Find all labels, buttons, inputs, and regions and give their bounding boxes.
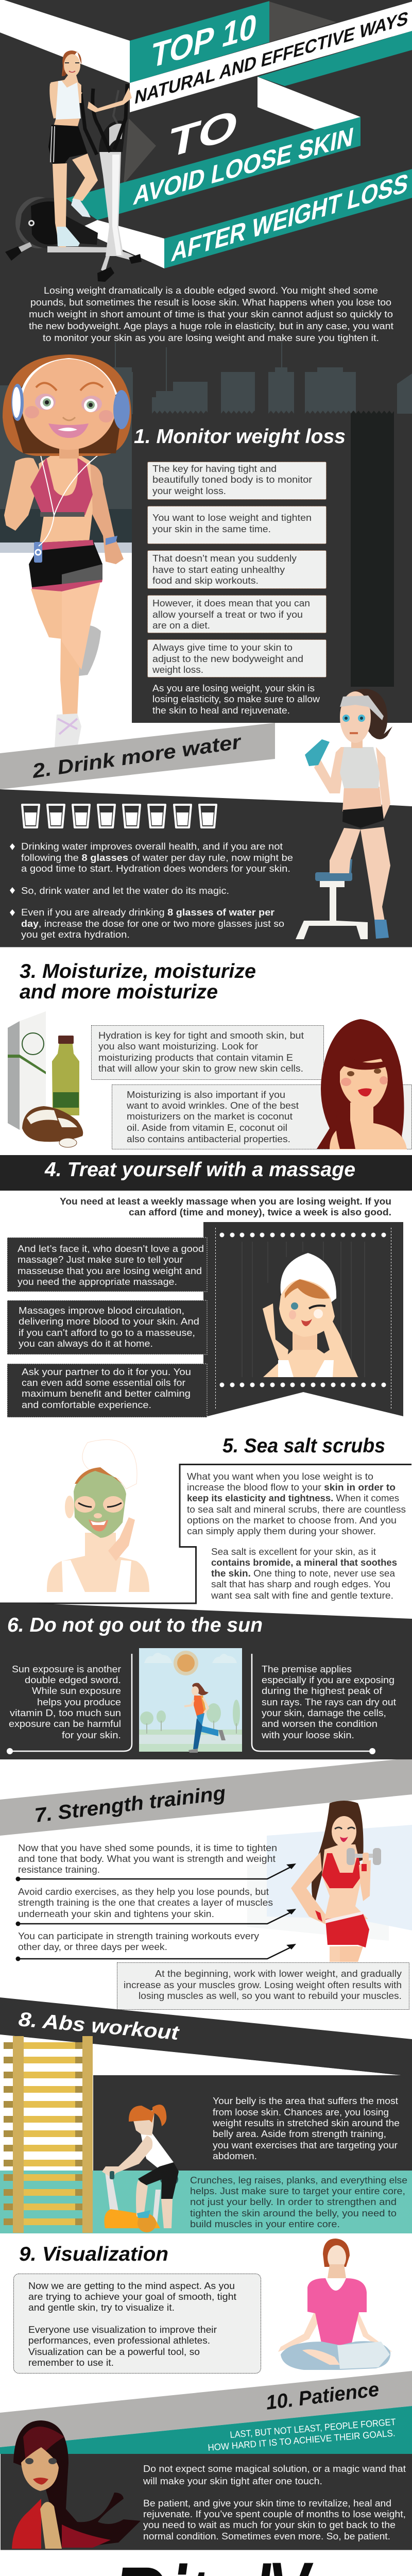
- callout: start with lower weight: [117, 1963, 409, 2009]
- section 5 outlined text frame: keep its elasticity and tightness. When it comes: [187, 1493, 399, 1503]
- section 7 paragraphs: resistance training.: [18, 1865, 100, 1875]
- section heading: 8. abs workout: 8. Abs workout: [18, 2008, 181, 2044]
- section 4 dark text cards: Ask your partner to do it for you. You: [22, 1367, 191, 1377]
- section 3 text cards: that will allow your skin to grow new skin cells.: [98, 1063, 303, 1074]
- section 8 upper text: belly area. Aside from strength training,: [213, 2129, 386, 2139]
- section 1 tip cards: You want to lose weight and tighten: [152, 513, 312, 523]
- intro paragraph: Losing weight dramatically is a double edged sword. You might shed some: [44, 285, 378, 296]
- section 1 tip cards: are on a diet.: [152, 620, 210, 631]
- section 2 bullet list: So, drink water and let the water do its magic.: [21, 886, 229, 896]
- section 10 paragraphs: will make your skin tight after one touch.: [143, 2476, 322, 2486]
- section 3 text cards: moisturizers on the market is coconut: [127, 1111, 293, 1122]
- section heading: 7. strength training: 7. Strength training: [33, 1782, 227, 1827]
- illustration: moisturizer box, oil bottle and coconut: [8, 1011, 83, 1147]
- section 4 intro text: can afford (time and money), twice a week is also good.: [129, 1207, 391, 1217]
- section 4 dark text cards: and comfortable experience.: [22, 1400, 151, 1410]
- logo: ritely: [110, 2520, 313, 2576]
- section 1 closing text: losing elasticity, so make sure to allow: [152, 694, 320, 704]
- section 2 bullet list: you get extra hydration.: [21, 929, 130, 940]
- intro paragraph: the new bodyweight. Age plays a huge role in elasticity, but in any case, you want: [29, 321, 393, 331]
- section 6 right text: and worsen the condition: [262, 1719, 377, 1729]
- section 1 closing text: the skin to heal and rejuvenate.: [152, 705, 290, 716]
- section 9 rounded text card: [13, 2274, 261, 2373]
- section 10 teal callout text: [208, 2417, 396, 2453]
- section 3 text cards: want to avoid wrinkles. One of the best: [126, 1100, 299, 1111]
- section 9 rounded text card: and gentle skin, try to visualize it.: [28, 2302, 175, 2313]
- title line: to: TO: [165, 100, 242, 167]
- illustration: woman with dumbbell: [291, 1801, 381, 1962]
- section 3 text cards: oil. Aside from vitamin E, coconut oil: [127, 1123, 287, 1133]
- section 9 rounded text card: are trying to achieve your goal of smooth, tight: [28, 2292, 236, 2302]
- section 1 tip cards: That doesn’t mean you suddenly: [152, 553, 297, 564]
- section 6 right text: your skin, damage the cells,: [262, 1708, 386, 1718]
- intro paragraph: pounds, but sometimes the result is loose skin. What happens when you lose too: [30, 297, 391, 308]
- section 4 dark text cards: [7, 1238, 207, 1417]
- section 1 tip cards: your weight loss.: [152, 486, 226, 496]
- section 6 right text: with your loose skin.: [261, 1730, 354, 1740]
- section 9 rounded text card: remember to use it.: [28, 2358, 114, 2368]
- section 2 background: [0, 723, 412, 947]
- section 4 dark text cards: you can always do it at home.: [19, 1338, 153, 1349]
- section 9 rounded text card: Now we are getting to the mind aspect. As you: [28, 2281, 235, 2291]
- section 1 tip cards: your skin in the same time.: [152, 524, 271, 534]
- section heading: 2. drink more water: 2. Drink more water: [30, 731, 243, 783]
- section 10 paragraphs: rejuvenate. If you’ve spent couple of months to lose weight,: [143, 2509, 406, 2519]
- title line: avoid loose skin: AVOID LOOSE SKIN: [131, 122, 355, 211]
- intro paragraph: to monitor your skin as you are losing weight and make sure you tighten it.: [43, 333, 379, 343]
- section 6 left text: While sun exposure: [32, 1686, 121, 1696]
- section 2 bullet list: Drinking water improves overall health, and if you are not: [21, 841, 283, 852]
- callout: start with lower weight: increase as your muscles grow. Losing weight often results with: [124, 1980, 402, 1990]
- illustration: meditating woman: [278, 2239, 392, 2370]
- section 8 lower text: helps. Just make sure to target your entire core,: [190, 2186, 405, 2196]
- section 5 outlined text frame: salt that has sharp and rough edges. You: [211, 1579, 390, 1589]
- section 10 band and heading backdrops: [0, 2371, 412, 2550]
- section 2 bullet list: following the 8 glasses of water per day rule, now might be: [21, 853, 293, 863]
- section 8 upper text: Your belly is the area that suffers the most: [213, 2096, 398, 2106]
- section 10 teal callout text: LAST, BUT NOT LEAST, PEOPLE FORGET: [230, 2417, 396, 2440]
- section 10 paragraphs: normal condition. Sometimes even more. So, be patient.: [143, 2531, 390, 2541]
- section 6 left text: double edged sword.: [25, 1675, 121, 1685]
- section 4 dark text cards: masseuse that you are losing weight and: [18, 1266, 202, 1276]
- section 10 teal callout text: HOW HARD IT IS TO ACHIEVE THEIR GOALS.: [208, 2428, 396, 2453]
- section 5 outlined text frame: increase the blood flow to your skin in order to: [187, 1482, 396, 1493]
- section heading: 3. moisturize: 3. Moisturize, moisturize: [20, 960, 256, 982]
- section 7 paragraphs: strength training is the one that creates a layer of muscles: [18, 1897, 273, 1908]
- section 7 paragraphs: and tone that body. What you want is strength and weight: [18, 1854, 276, 1864]
- section 1 closing text: As you are losing weight, your skin is: [152, 683, 315, 693]
- section 6 right text: especially if you are exposing: [262, 1675, 394, 1685]
- section 4 intro text: You need at least a weekly massage when you are losing weight. If you: [60, 1196, 391, 1207]
- section 1 tip cards: have to start eating unhealthy: [152, 565, 285, 575]
- section 4 dark text cards: maximum benefit and better calming: [22, 1388, 191, 1399]
- section 10 paragraphs: [143, 2464, 406, 2541]
- title line: top 10: TOP 10: [149, 6, 260, 76]
- section 5 outlined text frame: contains bromide, a mineral that soothes: [211, 1557, 397, 1568]
- section heading: 9. visualization: 9. Visualization: [19, 2243, 168, 2265]
- section 7 paragraphs: other day, or three days per week.: [18, 1942, 167, 1952]
- section 4 banner heading: [0, 1155, 412, 1191]
- section 3 text cards: you also want moisturizing. Look for: [98, 1041, 258, 1052]
- section 2 bullet list: [10, 841, 293, 940]
- section 6 left text: Sun exposure is another: [12, 1664, 121, 1674]
- arrow: third leader line: [15, 1944, 296, 1961]
- section 8 upper text: you want exercises that are targeting your: [213, 2140, 398, 2150]
- section 4 dark text cards: can even add some essential oils for: [22, 1378, 185, 1388]
- section 4 banner heading: 4. Treat yourself with a massage: [44, 1159, 355, 1181]
- section 7 paragraphs: underneath your skin and tightens your skin.: [18, 1909, 214, 1919]
- section 7 paragraphs: You can participate in strength training workouts every: [18, 1931, 259, 1941]
- section 5 outlined text frame: to sea salt and mineral scrubs, there are countless: [187, 1504, 406, 1515]
- section 7 band: [0, 1759, 412, 1836]
- section 8 lower text: [190, 2175, 407, 2229]
- section 1 tip cards: [147, 462, 327, 677]
- callout: start with lower weight: At the beginning, work with lower weight, and gradually: [155, 1969, 402, 1979]
- illustration: wall ladder: [4, 2036, 93, 2233]
- illustration: woman with water bottle on stool: [296, 689, 392, 939]
- section 7 paragraphs: Avoid cardio exercises, as they help you lose pounds, but: [18, 1887, 269, 1897]
- illustration: woman on elliptical trainer: [5, 50, 142, 282]
- section 1 tip cards: adjust to the new bodyweight and: [152, 654, 303, 664]
- section 5 outlined text frame: Sea salt is excellent for your skin, as it: [211, 1547, 376, 1557]
- section 5 outlined text frame: What you want when you lose weight is to: [187, 1471, 373, 1482]
- section 10 paragraphs: Do not expect some magical solution, or a magic wand that: [143, 2464, 406, 2474]
- intro paragraph: much weight in short amount of time is that your skin cannot adjust so quickly to: [29, 309, 393, 319]
- section 5 outlined text frame: the skin. One thing to note, never use sea: [211, 1568, 396, 1579]
- section 8 upper text: [212, 2096, 400, 2161]
- section 6 left text: vitamin D, too much sun: [10, 1708, 121, 1718]
- section heading: 3. moisturize: [20, 960, 256, 1003]
- section 1 tip cards: food and skip workouts.: [152, 575, 259, 586]
- arrow: first leader line: [15, 1863, 296, 1882]
- section 8 lower text: Crunches, leg raises, planks, and everything else: [190, 2175, 407, 2185]
- section 5 outlined text frame: [0, 1464, 411, 1603]
- section 4 dark text cards: Massages improve blood circulation,: [19, 1306, 184, 1316]
- section 8 upper text: abdomen.: [213, 2151, 257, 2161]
- decorative frame lines with end dots: [7, 1654, 375, 1754]
- section 5 outlined text frame: options on the market to choose from. And you: [187, 1515, 397, 1526]
- section 9 rounded text card: Everyone use visualization to improve their: [28, 2325, 217, 2335]
- section 5 outlined text frame: want sea salt with fine and gentle texture.: [211, 1590, 393, 1601]
- illustration: jogger with headphones: [3, 354, 131, 752]
- section 8 lower text: tighten the skin around the belly, you need to: [190, 2208, 397, 2218]
- illustration: woman with red hair: [317, 1019, 407, 1149]
- section 6 left text: helps you produce: [37, 1697, 121, 1707]
- section 6 left text: exposure can be harmful: [9, 1719, 121, 1729]
- section 4 intro text: [60, 1196, 391, 1217]
- section 2 bullet list: day, increase the dose for one or two more glasses just so: [21, 919, 284, 929]
- section 6 right text: The premise applies: [262, 1664, 352, 1674]
- section 6 right text: sun rays. The rays can dry out: [262, 1697, 396, 1707]
- section 6 right text: [261, 1664, 396, 1740]
- section 9 rounded text card: performances, even professional athletes.: [28, 2335, 210, 2346]
- section 1 tip cards: The key for having tight and: [152, 464, 277, 474]
- section 2 bullet list: Even if you are already drinking 8 glasses of water per: [21, 907, 274, 918]
- section 10 paragraphs: Be patient, and give your skin time to revitalize, heal and: [143, 2498, 391, 2509]
- section heading: 6. do not go out to the sun: 6. Do not go out to the sun: [7, 1614, 263, 1636]
- section 1 tip cards: allow yourself a treat or two if you: [152, 609, 303, 620]
- section 3 text cards: moisturizing products that contain vitamin E: [98, 1053, 293, 1063]
- section 3 text cards: also contains antibacterial properties.: [127, 1134, 290, 1144]
- illustration: woman with green face mask: [47, 1439, 149, 1592]
- callout: start with lower weight: losing muscles as well, so you want to rebuild your muscles.: [139, 1991, 402, 2001]
- section 10 paragraphs: you need to wait as much for your skin to get back to the: [143, 2520, 396, 2530]
- section 7 paragraphs: [18, 1843, 277, 1952]
- section 1 closing text: [152, 683, 320, 716]
- section heading: 10. patience: 10. Patience: [265, 2378, 380, 2414]
- section 9 rounded text card: Visualization can be a powerful tool, so: [28, 2347, 200, 2357]
- section 4 dark text cards: And let’s face it, who doesn’t love a good: [18, 1244, 204, 1254]
- section 8 upper text: weight results in stretched skin around the: [212, 2118, 400, 2128]
- section heading: 5. sea salt scrubs: 5. Sea salt scrubs: [222, 1435, 385, 1457]
- section 3 text cards: Hydration is key for tight and smooth skin, but: [98, 1030, 304, 1041]
- section 1 tip cards: beautifully toned body is to monitor: [152, 474, 312, 485]
- section 4 dark text cards: if you can’t afford to go to a masseuse,: [19, 1328, 195, 1338]
- intro paragraph: [29, 285, 393, 343]
- section 8 panel shapes: [0, 1997, 412, 2233]
- section 6 left text: for your skin.: [62, 1730, 121, 1740]
- illustration: woman with flowing hair: [12, 2420, 141, 2549]
- section 1 tip cards: However, it does mean that you can: [152, 598, 310, 608]
- section heading: 1. monitor weight loss: 1. Monitor weight loss: [134, 426, 346, 448]
- section 5 outlined text frame: can simply apply them during your shower.: [187, 1526, 376, 1536]
- section 8 lower text: not just your belly. In order to strengthen and: [190, 2197, 397, 2207]
- section 1 tip cards: weight loss.: [152, 665, 203, 675]
- arrow: second leader line: [15, 1909, 296, 1926]
- section 6 dark panel: [0, 1603, 412, 1759]
- section 4 dark text cards: massage? Just make sure to tell your: [18, 1255, 183, 1265]
- illustration: runner in the park under the sun: [139, 1648, 242, 1753]
- section 6 left text: [9, 1664, 121, 1740]
- section 6 right text: during the highest peak of: [262, 1686, 383, 1696]
- section 2 bullet list: a good time to start. Hydration does wonders for your skin.: [21, 863, 290, 874]
- section 4 dark text cards: delivering more blood to your skin. And: [19, 1316, 199, 1327]
- panel: massage portrait: [203, 1222, 403, 1416]
- illustration: woman on exercise bike: [102, 2105, 179, 2232]
- icons: eight glasses of water: [22, 805, 216, 827]
- backdrop shapes behind strength woman: [247, 1825, 412, 1941]
- section 8 lower text: build muscles in your entire core.: [190, 2219, 340, 2229]
- section 8 upper text: from loose skin. Chances are, you losing: [213, 2107, 389, 2117]
- section 3 text cards: Moisturizing is also important if you: [127, 1090, 285, 1100]
- section 3 text cards: [92, 1025, 412, 1149]
- section 7 paragraphs: Now that you have shed some pounds, it is time to tighten: [18, 1843, 277, 1853]
- section heading: 3. moisturize: and more moisturize: [20, 981, 218, 1003]
- section 4 dark text cards: you need the appropriate massage.: [18, 1277, 177, 1287]
- section 1 tip cards: Always give time to your skin to: [152, 642, 293, 653]
- header: title ribbons: [0, 0, 412, 268]
- section 1 background: city skyline: [0, 342, 412, 723]
